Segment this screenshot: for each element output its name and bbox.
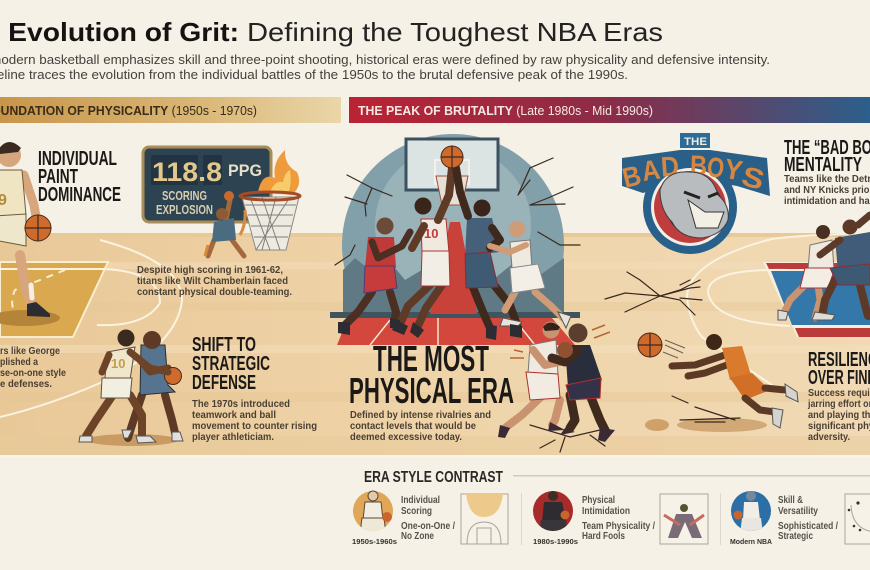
title: Defining the Toughest NBA Eras [247,17,663,47]
text: despite high scoring [137,264,292,298]
era modern nba: Sophisticated / [778,521,838,532]
banner: peak of brutality [349,97,870,123]
era 1950s-1960s: One-on-One / [401,521,455,532]
era 1980s-1990s: Team Physicality / [582,521,655,532]
text: 1970s teamwork: The 1970s introduced [192,398,290,410]
heading: individual paint dominance: PAINT [38,166,78,188]
ball at rim [441,146,463,168]
text: defined by intense rivalries: contact levels that would be [350,420,476,432]
era 1950s-1960s: Scoring [401,506,432,517]
heading: shift to strategic defense: SHIFT TO [192,333,256,356]
text: defined by intense rivalries: deemed excessive today. [350,431,462,443]
icon: bad boys logo: A [639,154,662,187]
heading: the most physical era [349,338,514,411]
cracks in backdrop [335,158,580,265]
red center lane [430,222,477,314]
heading: resilience over finesse [808,349,870,389]
icon: bad boys logo: B [690,150,708,181]
player in white on right [490,221,571,328]
scoreboard: 118.8 ppg: 118.8 [152,157,222,187]
era 1980s-1990s: Intimidation [582,506,630,517]
player in dark blue [456,168,518,328]
era 1950s-1960s: No Zone [401,531,434,542]
era modern nba: Skill & [778,495,803,506]
text: success required: adversity. [808,431,850,443]
icon: bad boys logo: B [619,159,644,194]
text: players like george: se-on-one style [0,367,66,379]
banner: foundation of physicality [0,97,341,123]
player in white jumping: 10 [424,226,438,241]
text: despite high scoring: constant physical double-teaming. [137,286,292,298]
era 1980s-1990s [533,491,708,546]
text: players like george [0,345,66,390]
players: right court [778,215,870,320]
era 1950s-1960s: 1950s-1960s [352,537,397,546]
era modern nba: Strategic [778,531,813,542]
era modern nba [730,491,870,546]
scoreboard: 118.8 ppg [143,147,271,222]
right paint area [708,262,870,337]
text: despite high scoring: Despite high scoring in 1961-62, [137,264,283,276]
text: 1970s teamwork [192,398,317,443]
heading rule [513,475,870,476]
banner: peak of brutality: THE PEAK OF BRUTALITY (Late 1980s - Mid 1990s) [358,104,653,118]
icon: bad boys logo: THE [684,136,707,148]
icon: floor crack [605,272,702,315]
text: 1970s teamwork: teamwork and ball [192,409,276,421]
heading: the most physical era: THE MOST [373,338,489,379]
era modern nba: Versatility [778,506,818,517]
era 1980s-1990s: Hard Fools [582,531,625,542]
text: teams like the detroit [784,173,870,207]
scoreboard: 118.8 ppg: PPG [228,161,262,180]
text: players like george: e defenses. [0,378,52,390]
scoreboard: 118.8 ppg: SCORING [162,188,207,203]
divider [521,493,522,545]
basketball court floor [0,233,870,457]
player: individual paint dominance [0,142,51,317]
grey backdrop circle [330,134,580,318]
icon: bad boys logo: O [706,151,726,184]
text: players like george: rs like George [0,345,60,357]
icon: bad boys logo: D [660,150,680,183]
players: shift to strategic defense: 10 [111,356,125,371]
player in red [345,218,410,325]
heading: shift to strategic defense [192,333,270,394]
heading: bad boys mentality [784,137,870,176]
player in white jumping [401,168,452,326]
heading: shift to strategic defense: STRATEGIC [192,352,270,375]
era 1950s-1960s: Individual [401,495,440,506]
scoreboard: 118.8 ppg: EXPLOSION [156,202,213,217]
text: 1970s teamwork: player athleticiam. [192,431,274,443]
text: success required [807,387,870,443]
text: defined by intense rivalries: Defined by intense rivalries and [350,409,491,421]
backboard and hoop [406,139,498,205]
text: players like george: plished a [0,356,38,368]
heading: individual paint dominance: INDIVIDUAL [38,148,117,170]
era 1980s-1990s: 1980s-1990s [533,537,578,546]
text: despite high scoring: titans like Wilt Chamberlain faced [137,275,288,287]
center scene: most physical era [330,134,580,356]
text: defined by intense rivalries [350,409,491,443]
era modern nba: Modern NBA [730,537,773,546]
icon: bad boys logo: Y [722,153,745,187]
players: physical clash [498,322,615,452]
left paint area [0,262,108,337]
heading: individual paint dominance: DOMINANCE [38,184,121,206]
small player jumping at hoop [205,191,245,256]
icon: bad boys logo: S [738,160,768,196]
title [0,17,663,47]
heading: individual paint dominance [38,148,121,206]
red floor [337,318,575,345]
shoes [338,318,522,340]
panel: era style contrast [352,469,870,546]
player: diving for the ball [638,333,798,432]
divider [720,493,721,545]
icon: bad boys logo [619,133,770,254]
heading: shift to strategic defense: DEFENSE [192,371,256,394]
era 1980s-1990s: Physical [582,495,615,506]
heading: the most physical era: PHYSICAL ERA [349,370,514,411]
icon: flaming hoop [240,150,300,250]
text: 1970s teamwork: movement to counter rising [192,420,317,432]
era 1950s-1960s [352,491,508,546]
intro text [0,53,770,82]
legend heading: ERA STYLE CONTRAST [364,469,503,486]
players: shift to strategic defense [79,330,183,446]
